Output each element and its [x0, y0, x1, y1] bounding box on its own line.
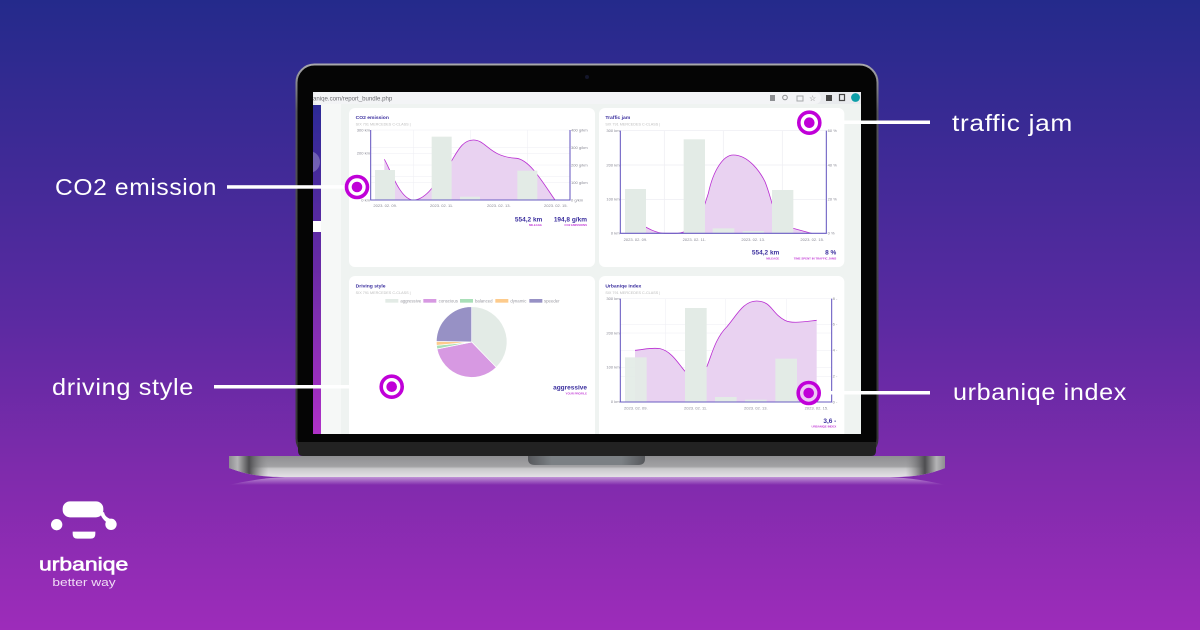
laptop chin	[298, 442, 876, 456]
combo chart: 0 km	[361, 197, 371, 202]
label: traffic jam	[952, 110, 1073, 136]
combo chart: 2023. 02. 09.	[624, 237, 647, 242]
sidebar	[313, 105, 321, 434]
profile value	[553, 385, 587, 394]
base reflection	[229, 477, 945, 485]
combo chart: 2023. 02. 11.	[430, 203, 453, 208]
leader line	[822, 120, 930, 124]
combo chart	[606, 128, 837, 242]
panel: driving style	[349, 276, 595, 439]
combo chart: 0 km	[611, 399, 620, 404]
callout: traffic jam	[799, 110, 1073, 136]
profile value: aggressive	[553, 385, 587, 392]
panel: urbaniqe index	[599, 276, 844, 439]
combo chart: 200 km	[606, 330, 620, 335]
mileage value: MILEAGE	[529, 223, 542, 227]
combo chart: 300 km	[606, 128, 620, 133]
marker	[798, 382, 819, 404]
combo chart: 0 %	[828, 231, 835, 236]
legend: dynamic	[510, 298, 527, 303]
combo chart: 2023. 02. 11.	[683, 237, 706, 242]
marker	[381, 376, 402, 397]
marker	[799, 112, 820, 133]
legend: balanced	[475, 298, 493, 303]
panel: CO2 emission: SIX 791 MERCEDES C-CLASS |	[356, 123, 411, 127]
combo chart: 6 -	[833, 322, 838, 327]
combo chart: 200 km	[357, 151, 371, 156]
combo chart: 100 km	[606, 197, 620, 202]
pie chart	[436, 307, 507, 377]
combo chart: 0 g/km	[571, 197, 584, 202]
logo icon	[51, 501, 117, 539]
mileage value	[752, 250, 780, 260]
label: driving style	[52, 374, 194, 400]
combo chart: 300 km	[606, 296, 620, 301]
mileage value: 554,2 km	[752, 250, 780, 257]
label: CO2 emission	[55, 174, 217, 200]
combo chart: 2023. 02. 09.	[373, 203, 397, 208]
combo chart: 2023. 02. 13.	[741, 237, 765, 242]
browser toolbar: aniqe.com/report_bundle.php	[313, 96, 393, 102]
combo chart: 8 -	[833, 296, 838, 301]
CO2 value	[554, 217, 587, 226]
combo chart: 60 %	[828, 128, 837, 133]
marker	[346, 176, 368, 198]
panel: driving style: SIX 791 MERCEDES C-CLASS |	[356, 291, 411, 295]
CO2 value: CO2 EMISSIONS	[564, 223, 587, 227]
combo chart: 100 g/km	[571, 180, 588, 185]
panel: CO2 emission	[349, 108, 595, 267]
laptop base	[229, 456, 945, 485]
combo chart: 300 km	[357, 127, 371, 132]
dashboard page background	[313, 92, 861, 434]
callout: urbaniqe index	[798, 379, 1127, 405]
CO2 value: 194,8 g/km	[554, 216, 587, 223]
wordmark: urbaniqe	[39, 554, 128, 575]
combo chart: 2023. 02. 15.	[544, 203, 568, 208]
label: urbaniqe index	[953, 379, 1127, 405]
combo chart	[606, 296, 838, 410]
browser toolbar	[313, 93, 860, 102]
combo chart: 20 %	[828, 197, 837, 202]
panel: urbaniqe index: SIX 791 MERCEDES C-CLASS |	[605, 291, 660, 295]
logo: urbaniqe	[39, 501, 128, 589]
laptop mockup	[229, 64, 945, 485]
combo chart: 2 -	[833, 374, 838, 379]
legend: conscious	[439, 298, 458, 303]
leader line	[227, 185, 345, 189]
combo chart: 2023. 02. 15.	[805, 405, 828, 410]
heading: Urbaniqe index	[605, 283, 642, 289]
combo chart	[357, 127, 588, 208]
mileage value: MILEAGE	[766, 256, 779, 260]
heading: CO2 emission	[356, 115, 389, 121]
screen	[298, 92, 861, 439]
heading: Traffic jam	[605, 115, 631, 121]
callout: CO2 emission	[55, 174, 368, 200]
camera	[585, 75, 589, 79]
browser toolbar: ☆	[809, 94, 816, 103]
index value: 3,6 -	[823, 418, 836, 425]
combo chart: 2023. 02. 15.	[800, 237, 824, 242]
mileage value	[515, 217, 542, 226]
combo chart: 0 -	[833, 399, 838, 404]
combo chart: 300 g/km	[571, 145, 588, 150]
combo chart: 2023. 02. 09.	[624, 405, 648, 410]
heading: Driving style	[356, 283, 386, 289]
profile value: YOUR PROFILE	[566, 392, 587, 396]
legend: speeder	[544, 298, 560, 303]
time in jam value	[794, 250, 836, 260]
combo chart: 2023. 02. 13.	[744, 405, 768, 410]
index value: URBANIQE INDEX	[812, 425, 836, 429]
combo chart: 400 g/km	[571, 127, 588, 132]
legend	[385, 299, 560, 304]
legend: aggressive	[400, 298, 422, 303]
mileage value: 554,2 km	[515, 216, 543, 223]
time in jam value: 8 %	[825, 250, 837, 257]
panel: traffic jam	[599, 108, 844, 267]
combo chart: 2023. 02. 13.	[487, 203, 511, 208]
time in jam value: TIME SPENT IN TRAFFIC JAMS	[794, 256, 836, 260]
combo chart: 2023. 02. 11.	[684, 405, 707, 410]
combo chart: 40 %	[828, 162, 837, 167]
combo chart: 200 g/km	[571, 162, 588, 167]
laptop lid	[296, 64, 878, 456]
hinge notch	[528, 456, 645, 465]
combo chart: 200 km	[606, 162, 620, 167]
index value	[812, 418, 836, 428]
callout: driving style	[52, 374, 402, 400]
combo chart: 100 km	[606, 365, 620, 370]
combo chart: 4 -	[833, 348, 838, 353]
panel: traffic jam: SIX 791 MERCEDES C-CLASS |	[605, 123, 660, 127]
tagline: better way	[52, 577, 116, 589]
combo chart: 0 km	[611, 231, 620, 236]
leader line	[214, 385, 350, 388]
leader line	[822, 391, 930, 394]
